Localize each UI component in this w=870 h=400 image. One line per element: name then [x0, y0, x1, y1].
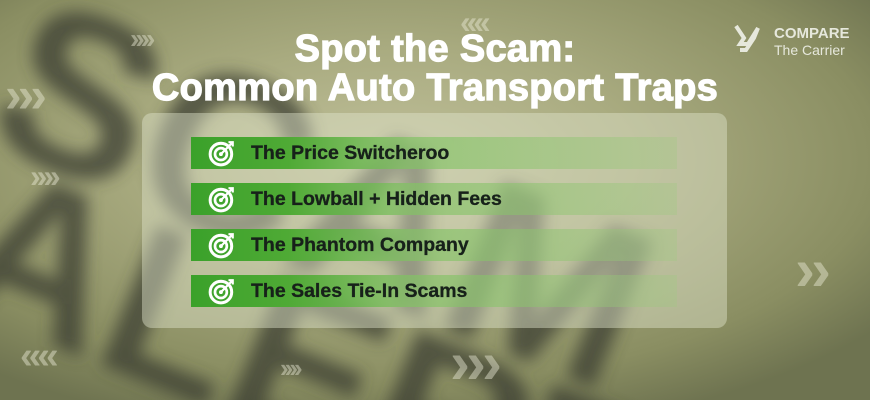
item 1: The Price Switcheroo [251, 142, 449, 164]
text: ››› [450, 329, 498, 396]
item 3: The Phantom Company [251, 234, 469, 256]
text: ‹‹‹‹ [460, 4, 487, 40]
title: Common Auto Transport Traps [152, 67, 718, 109]
title: Spot the Scam: [295, 28, 575, 70]
text: ›› [795, 236, 827, 303]
item 4: The Sales Tie-In Scams [251, 280, 467, 302]
item 4 [191, 275, 677, 307]
text: ›››› [30, 158, 57, 194]
panel: list [142, 113, 727, 328]
text: ››› [5, 67, 43, 123]
logo [734, 24, 850, 58]
item 1 [191, 137, 677, 169]
item 2 [191, 183, 677, 215]
logo: COMPARE [774, 25, 850, 42]
text: ›››› [130, 23, 151, 54]
text: ‹‹‹‹ [20, 335, 55, 377]
item 2: The Lowball + Hidden Fees [251, 188, 502, 210]
text: ›››› [280, 353, 299, 383]
item 3 [191, 229, 677, 261]
title [152, 28, 718, 109]
logo: The Carrier [774, 42, 845, 58]
